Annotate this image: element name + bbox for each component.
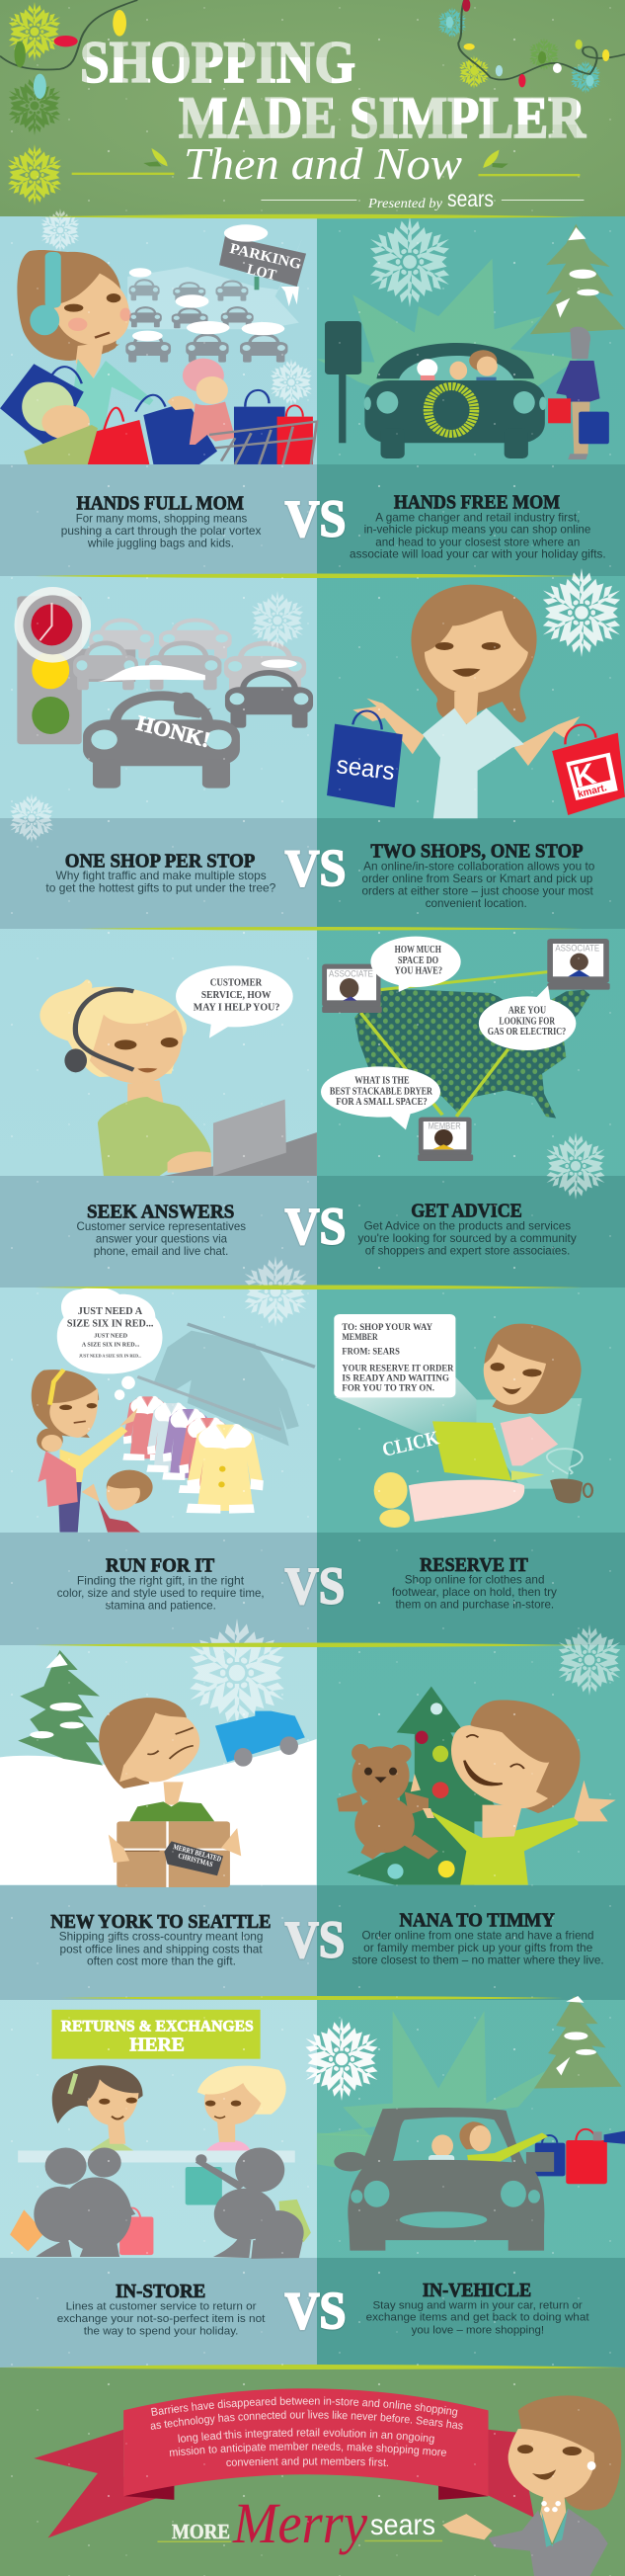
email card: FOR YOU TO TRY ON. (342, 1383, 434, 1393)
speech bubble: gas or electric: GAS OR ELECTRIC? (488, 1027, 566, 1038)
speech bubble: stackable dryer: BEST STACKABLE DRYER (330, 1086, 433, 1097)
icon: pine tree (534, 1996, 622, 2089)
icon: traffic light with clock (15, 587, 135, 744)
left caption: one shop per stop: ONE SHOP PER STOP (65, 849, 256, 872)
returns sign: HERE (129, 2033, 185, 2055)
left caption: in-store: exchange your not-so-perfect item is not (57, 2312, 266, 2325)
left caption: new york to seattle: NEW YORK TO SEATTLE (50, 1910, 272, 1932)
header rules and leaves (72, 148, 584, 201)
subtitle: Then and Now (184, 139, 462, 189)
left caption: in-store: IN-STORE (116, 2280, 205, 2302)
right caption: nana to timmy: or family member pick up your gifts from the (363, 1941, 592, 1954)
parking sign text: LOT (245, 262, 277, 284)
speech bubble: how much space: HOW MUCH (395, 945, 441, 956)
icon: mother with children (32, 1370, 153, 1533)
laptop: associate left: ASSOCIATE (329, 969, 373, 979)
speech bubble: MAY I HELP YOU? (194, 1000, 279, 1013)
illustration: community map (321, 937, 610, 1161)
icon: coffee mug (547, 1449, 592, 1503)
speech bubble: how much space: YOU HAVE? (395, 966, 442, 976)
title: SHOPPING (80, 30, 355, 95)
right caption: in-vehicle (366, 2279, 589, 2336)
illustration: late package (0, 1650, 317, 1887)
email card (334, 1314, 455, 1397)
illustration: reserve it online (334, 1314, 592, 1528)
vs badge: VS (285, 839, 346, 897)
speech bubble: SERVICE, HOW (201, 988, 272, 1001)
icon: delivery truck (215, 1711, 305, 1767)
more merry sears logo: sears (370, 2509, 435, 2541)
email card: FROM: SEARS (342, 1347, 400, 1357)
left caption: seek answers: phone, email and live chat. (94, 1244, 228, 1258)
right caption: get advice: GET ADVICE (411, 1200, 522, 1221)
icon: flustered mom (17, 250, 153, 435)
icon: christmas tree with ornaments (347, 1687, 505, 1885)
illustration: in-vehicle return (317, 1996, 625, 2251)
right caption: two shops one stop: convenient location. (426, 896, 527, 910)
right caption: get advice (358, 1200, 577, 1257)
illustration: returns counter (10, 2010, 311, 2259)
section snowflakes (6, 568, 625, 2101)
left caption: new york to seattle: post office lines and shipping costs that (60, 1942, 263, 1955)
right caption: get advice: you're looking for sourced by a community (358, 1231, 577, 1245)
right caption: reserve it (392, 1553, 558, 1611)
speech bubble: CUSTOMER (210, 975, 262, 988)
illustration: mom at coat rack (32, 1288, 315, 1533)
right caption: hands free mom: HANDS FREE MOM (394, 490, 560, 513)
right caption: reserve it: Shop online for clothes and (405, 1573, 544, 1586)
icon: car with family (364, 343, 546, 458)
thought cloud: SIZE SIX IN RED... (67, 1319, 154, 1329)
left caption: run for it: color, size and style used to require time, (57, 1586, 265, 1600)
band 2 text (45, 839, 594, 910)
thought cloud: JUST NEED A SIZE SIX IN RED... (79, 1354, 141, 1358)
speech bubble: gas or electric: ARE YOU (508, 1006, 546, 1016)
left caption: hands full mom: pushing a cart through the polar vortex (61, 524, 262, 538)
left caption: seek answers: Customer service representatives (77, 1219, 246, 1233)
left caption: one shop per stop: Why fight traffic and make multiple stops (56, 869, 267, 882)
left caption: in-store: Lines at customer service to return or (66, 2299, 257, 2312)
left caption: hands full mom: HANDS FULL MOM (77, 492, 244, 514)
left caption: run for it: stamina and patience. (106, 1599, 216, 1612)
right caption: reserve it: footwear, place on hold, then try (392, 1585, 558, 1599)
icon: customer bags (10, 2167, 311, 2255)
vs badge: VS (285, 1911, 345, 1968)
section 2: one shop vs two shops (15, 585, 625, 818)
parking sign text (228, 241, 303, 284)
parking sign text: PARKING (228, 241, 303, 273)
left caption: in-store: the way to spend your holiday. (84, 2324, 238, 2337)
speech bubble: gas or electric: LOOKING FOR (499, 1016, 556, 1027)
footer panel (0, 2368, 625, 2576)
parking lot cars (125, 268, 287, 363)
speech bubble: gas or electric (479, 985, 576, 1050)
left caption: one shop per stop (45, 849, 275, 894)
icon: christmas tree (530, 224, 625, 334)
speech bubble (176, 965, 293, 1039)
right caption: nana to timmy (352, 1909, 604, 1966)
icon: car (334, 2108, 554, 2251)
left caption: hands full mom: while juggling bags and kids. (87, 537, 234, 549)
thought cloud: JUST NEED A (78, 1306, 142, 1317)
left caption: new york to seattle (50, 1910, 272, 1967)
left caption: hands full mom (61, 492, 262, 549)
right caption: in-vehicle: you love – more shopping! (412, 2323, 544, 2336)
email card: IS READY AND WAITING (342, 1373, 449, 1383)
speech bubble: stackable dryer: FOR A SMALL SPACE? (336, 1097, 428, 1108)
speech bubble: how much space (370, 937, 461, 992)
icon: customers in line (34, 2148, 304, 2259)
title (80, 30, 586, 150)
thought cloud: JUST NEED (94, 1333, 127, 1339)
left caption: seek answers: SEEK ANSWERS (87, 1200, 234, 1222)
icon: shopping bags and children (0, 359, 317, 464)
thought cloud (57, 1288, 162, 1373)
returns sign (51, 2010, 261, 2059)
service counter (18, 2150, 295, 2162)
coats on the rack (122, 1396, 264, 1514)
right caption: hands free mom: A game changer and retail industry first, (375, 511, 580, 524)
vs badge: VS (285, 2282, 346, 2340)
illustration: smiling mom with bags (327, 585, 625, 818)
presented by sears: Presented by (367, 197, 443, 211)
laptop: member (418, 1118, 473, 1161)
coat silhouette and rack (137, 1324, 315, 1446)
snowflakes (38, 208, 316, 406)
kmart logo letter: K (571, 757, 599, 794)
left caption: seek answers (77, 1200, 246, 1258)
icon: store associate (548, 327, 609, 459)
ribbon banner (34, 2388, 534, 2537)
left caption: one shop per stop: to get the hottest gifts to put under the tree? (45, 881, 275, 894)
more merry sears logo: MORE (172, 2520, 230, 2543)
illustration: boy with teddy bear (337, 1687, 616, 1885)
section 6: in-store vs in-vehicle (10, 1996, 625, 2340)
right caption: get advice: of shoppers and expert store associates. (365, 1243, 570, 1257)
section 1: hands full vs hands free (0, 208, 625, 464)
icon: kmart bag (552, 725, 625, 815)
email card: YOUR RESERVE IT ORDER (342, 1364, 454, 1373)
ribbon copy (150, 2397, 463, 2467)
starburst lower (317, 2133, 399, 2174)
icon: laptop and desk (164, 1100, 317, 1176)
vs badge: VS (285, 490, 346, 547)
header panel (0, 0, 625, 216)
kmart label: kmart. (577, 783, 608, 800)
illustration: customer service agent (39, 965, 317, 1176)
left caption: run for it (57, 1554, 265, 1612)
icon: parking sign (219, 224, 306, 306)
more merry sears logo (172, 2491, 435, 2555)
woman presenter (442, 2395, 621, 2576)
icon: sears bag (327, 710, 403, 807)
right caption: hands free mom (350, 490, 606, 560)
ribbon copy: mission to anticipate member needs, make shopping more (170, 2442, 446, 2456)
right caption: in-vehicle: IN-VEHICLE (423, 2279, 531, 2301)
connection lines (360, 971, 550, 1117)
thought cloud: A SIZE SIX IN RED... (82, 1342, 140, 1348)
icon: pine tree (18, 1650, 103, 1766)
laptop: associate left (322, 964, 382, 1013)
left caption: seek answers: answer your questions via (96, 1232, 228, 1245)
icon: header snowflakes (2, 2, 603, 206)
ribbon copy: as technology has connected our lives like never before. Sears has (150, 2410, 463, 2430)
more merry sears logo: Merry (232, 2491, 367, 2555)
speech bubble: stackable dryer (321, 1066, 440, 1129)
band 1 text (15, 490, 625, 818)
right caption: hands free mom: and head to your closest store where an (375, 536, 580, 548)
honk label: HONK! (134, 710, 213, 752)
email card: MEMBER (342, 1333, 378, 1343)
icon: happy boy (411, 1700, 616, 1885)
click label: CLICK (380, 1427, 441, 1461)
icon: woman (352, 585, 580, 818)
sears bag label: sears (335, 751, 396, 786)
vs badge: VS (285, 1556, 345, 1615)
thought bubble dots (115, 1376, 135, 1400)
presented by sears (367, 186, 494, 211)
ribbon copy: Barriers have disappeared between in-store and online shopping (151, 2397, 458, 2418)
icon: associate dark hair (52, 2065, 143, 2150)
laptop: associate right: ASSOCIATE (555, 944, 599, 954)
illustration: parking lot (125, 224, 306, 363)
ribbon copy: convenient and put members first. (226, 2456, 388, 2467)
right caption: in-vehicle: exchange items and get back to doing what (366, 2310, 589, 2324)
section 5: new york to seattle vs nana to timmy (0, 1650, 616, 1968)
speech bubble: how much space: SPACE DO (398, 956, 438, 966)
right caption: reserve it: them on and purchase in-store. (395, 1598, 554, 1611)
icon: agent with headset (39, 979, 211, 1176)
left caption: new york to seattle: Shipping gifts cross-country meant long (59, 1930, 263, 1943)
right caption: in-vehicle: Stay snug and warm in your car, return or (372, 2298, 583, 2311)
map of usa (354, 988, 589, 1119)
section 4: run for it vs reserve it (32, 1288, 592, 1615)
icon: teddy bear (337, 1744, 438, 1860)
icon: disappointed boy with package (99, 1698, 241, 1887)
right caption: get advice: Get Advice on the products and services (364, 1218, 571, 1232)
email card: TO: SHOP YOUR WAY (342, 1323, 432, 1333)
snowy hill (0, 1739, 317, 1885)
right caption: two shops one stop (362, 839, 594, 910)
footer rule right (364, 2540, 442, 2541)
left caption: in-store (57, 2280, 266, 2337)
section 3: seek answers vs get advice (39, 937, 610, 1258)
left caption: run for it: Finding the right gift, in the right (77, 1574, 244, 1587)
laptop: associate right (547, 939, 610, 990)
left caption: run for it: RUN FOR IT (106, 1554, 214, 1576)
illustration: in-vehicle pickup (317, 216, 625, 459)
vs badge: VS (285, 1197, 346, 1255)
string lights (0, 0, 625, 99)
traffic cars (73, 619, 313, 789)
icon: pickup sign post (325, 321, 361, 443)
icon: associate blonde (197, 2066, 286, 2150)
laptop: member: MEMBER (429, 1122, 461, 1131)
left caption: new york to seattle: often cost more than the gift. (87, 1954, 236, 1967)
gift tag text: CHRISTMAS (177, 1851, 214, 1869)
presented by sears: sears (447, 186, 494, 211)
illustration: traffic jam (15, 587, 313, 789)
gift tag text: MERRY BELATED (172, 1842, 223, 1864)
starburst (317, 2011, 554, 2136)
footer rules (157, 2540, 231, 2542)
returns sign: RETURNS & EXCHANGES (61, 2017, 254, 2035)
right caption: reserve it: RESERVE IT (420, 1553, 528, 1575)
speech bubble: stackable dryer: WHAT IS THE (354, 1076, 410, 1086)
light beam (335, 1376, 499, 1440)
ribbon copy: long lead this integrated retail evolution in an ongoing (178, 2428, 434, 2445)
icon: shopping bags being loaded (535, 2129, 625, 2184)
icon: woman with laptop (374, 1324, 582, 1528)
left caption: hands full mom: For many moms, shopping means (76, 512, 247, 525)
right caption: nana to timmy: NANA TO TIMMY (400, 1909, 555, 1931)
